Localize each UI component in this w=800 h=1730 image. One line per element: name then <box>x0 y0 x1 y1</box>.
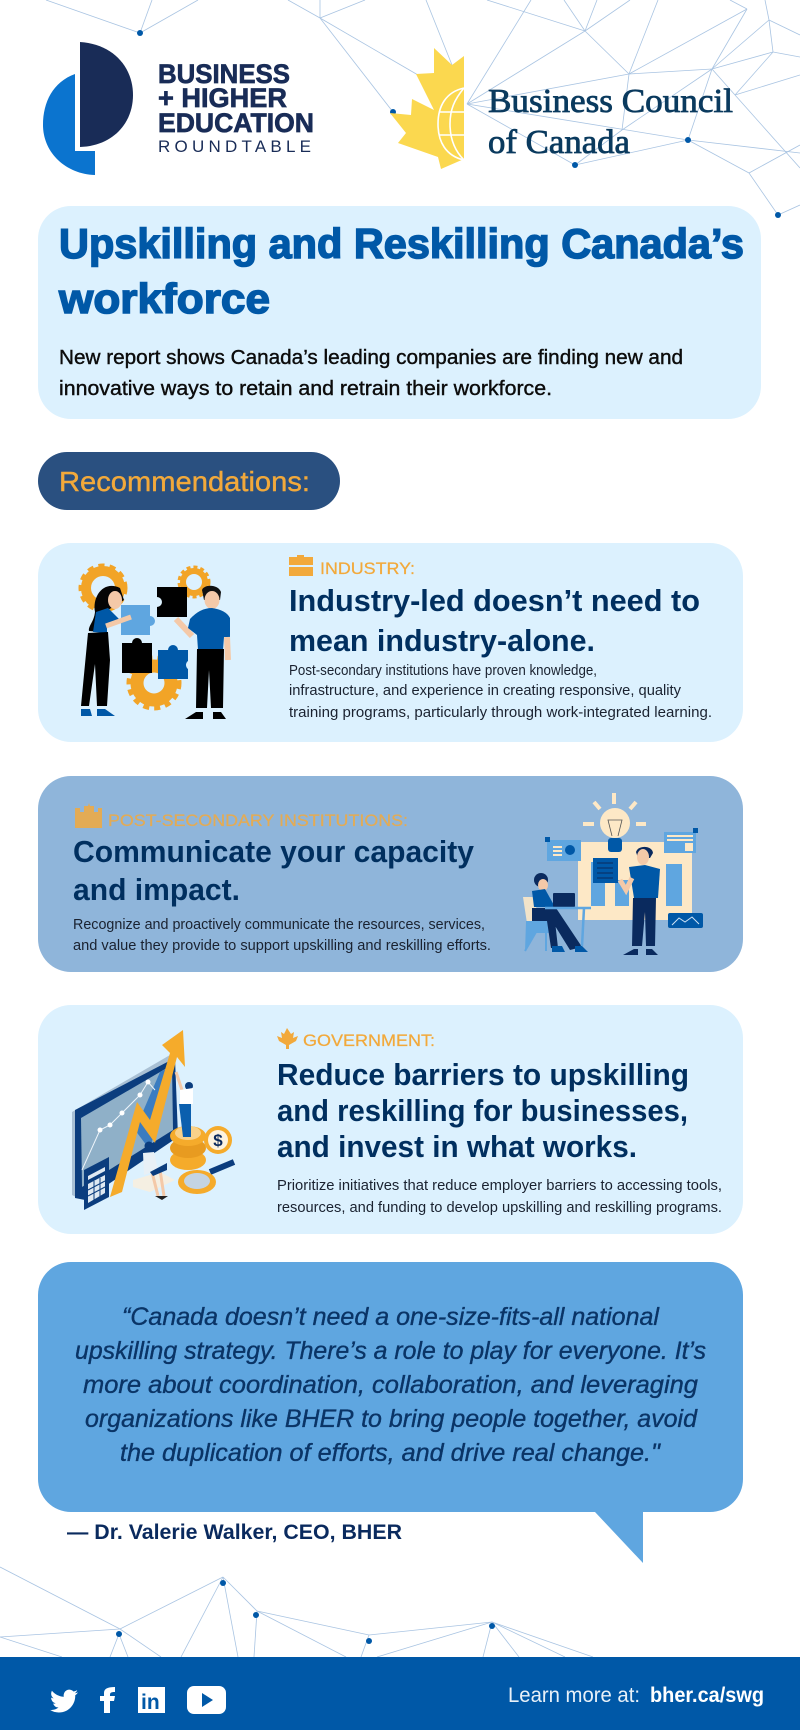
footer link text <box>508 1684 764 1707</box>
illustration: growth arrow with coins <box>72 1030 234 1210</box>
heading: government: Reduce barriers to upskilling <box>277 1057 689 1092</box>
footer link text: Learn more at: <box>508 1684 640 1707</box>
logo: Business Council of Canada: of Canada <box>488 124 630 161</box>
heading: government: and reskilling for businesses, <box>277 1093 688 1128</box>
quote text: “Canada doesn’t need a one-size-fits-all national <box>122 1303 660 1331</box>
footer link text: bher.ca/swg <box>650 1684 764 1707</box>
quote text <box>75 1303 706 1467</box>
quote text: organizations like BHER to bring people together, avoid <box>85 1405 698 1433</box>
icon: briefcase <box>289 555 313 576</box>
intro text <box>59 347 683 400</box>
icon: maple leaf <box>277 1028 298 1049</box>
logo: Business + Higher Education Roundtable <box>43 42 314 175</box>
body: post-secondary <box>73 917 491 954</box>
quote text: more about coordination, collaboration, and leveraging <box>83 1371 698 1399</box>
recommendations pill <box>38 452 340 510</box>
body: industry <box>289 663 712 721</box>
logo: Business Council of Canada: Business Council <box>488 83 733 120</box>
heading: workforce <box>58 275 270 322</box>
icon: linkedin <box>138 1687 165 1714</box>
panel: post-secondary institutions <box>38 776 743 972</box>
network pattern: bottom <box>0 1567 593 1657</box>
heading: government: and invest in what works. <box>277 1129 637 1164</box>
footer bar <box>0 1657 800 1730</box>
logo: Business + Higher Education Roundtable: ROUNDTABLE <box>158 137 311 156</box>
body: industry: infrastructure, and experience in creating responsive, quality <box>289 683 682 699</box>
logo: Business + Higher Education Roundtable: + HIGHER <box>158 83 287 113</box>
panel: government <box>38 1005 743 1234</box>
illustration: people with puzzle pieces <box>81 566 230 719</box>
body: post-secondary: and value they provide to support upskilling and reskilling efforts. <box>73 938 491 954</box>
icon: facebook <box>100 1687 115 1713</box>
heading: post-secondary: and impact. <box>73 872 240 907</box>
intro text: New report shows Canada’s leading companies are finding new and <box>59 347 683 369</box>
heading: industry <box>289 583 700 658</box>
body: government <box>277 1178 722 1216</box>
heading: post-secondary <box>73 834 475 907</box>
panel: quote speech bubble <box>38 1262 743 1563</box>
icon: twitter <box>50 1690 78 1712</box>
panel: title <box>38 206 761 419</box>
panel: industry: INDUSTRY: <box>320 559 415 578</box>
quote text: upskilling strategy. There’s a role to play for everyone. It’s <box>75 1337 706 1365</box>
icon: youtube <box>187 1686 226 1714</box>
intro text: innovative ways to retain and retrain their workforce. <box>59 378 552 400</box>
quote attribution: — Dr. Valerie Walker, CEO, BHER <box>67 1521 402 1544</box>
network pattern: top <box>46 0 800 218</box>
heading: government <box>277 1057 689 1164</box>
panel: industry <box>38 543 743 742</box>
logo: Business + Higher Education Roundtable: BUSINESS <box>158 59 290 89</box>
heading: industry: Industry-led doesn’t need to <box>289 583 700 618</box>
recommendations pill: Recommendations: <box>59 466 310 497</box>
body: government: Prioritize initiatives that reduce employer barriers to accessing tools, <box>277 1178 722 1194</box>
heading: post-secondary: Communicate your capacity <box>73 834 475 869</box>
logo: Business Council of Canada <box>390 48 733 169</box>
icon: linkedin: in <box>141 1691 160 1714</box>
heading: industry: mean industry-alone. <box>289 623 595 658</box>
heading <box>58 220 744 322</box>
body: government: resources, and funding to develop upskilling and reskilling programs. <box>277 1200 722 1216</box>
illustration: growth arrow with coins: $ <box>213 1131 223 1150</box>
heading: Upskilling and Reskilling Canada’s <box>59 220 744 267</box>
logo: Business + Higher Education Roundtable: EDUCATION <box>158 108 314 138</box>
icon: university building <box>75 803 102 828</box>
body: industry: Post-secondary institutions have proven knowledge, <box>289 663 597 679</box>
illustration: presenter with light bulb <box>523 793 703 955</box>
quote text: the duplication of efforts, and drive real change." <box>120 1439 661 1467</box>
panel: post-secondary institutions: POST-SECONDARY INSTITUTIONS: <box>108 811 408 830</box>
body: industry: training programs, particularly through work-integrated learning. <box>289 705 712 721</box>
panel: government: GOVERNMENT: <box>303 1031 435 1050</box>
body: post-secondary: Recognize and proactively communicate the resources, services, <box>73 917 485 933</box>
